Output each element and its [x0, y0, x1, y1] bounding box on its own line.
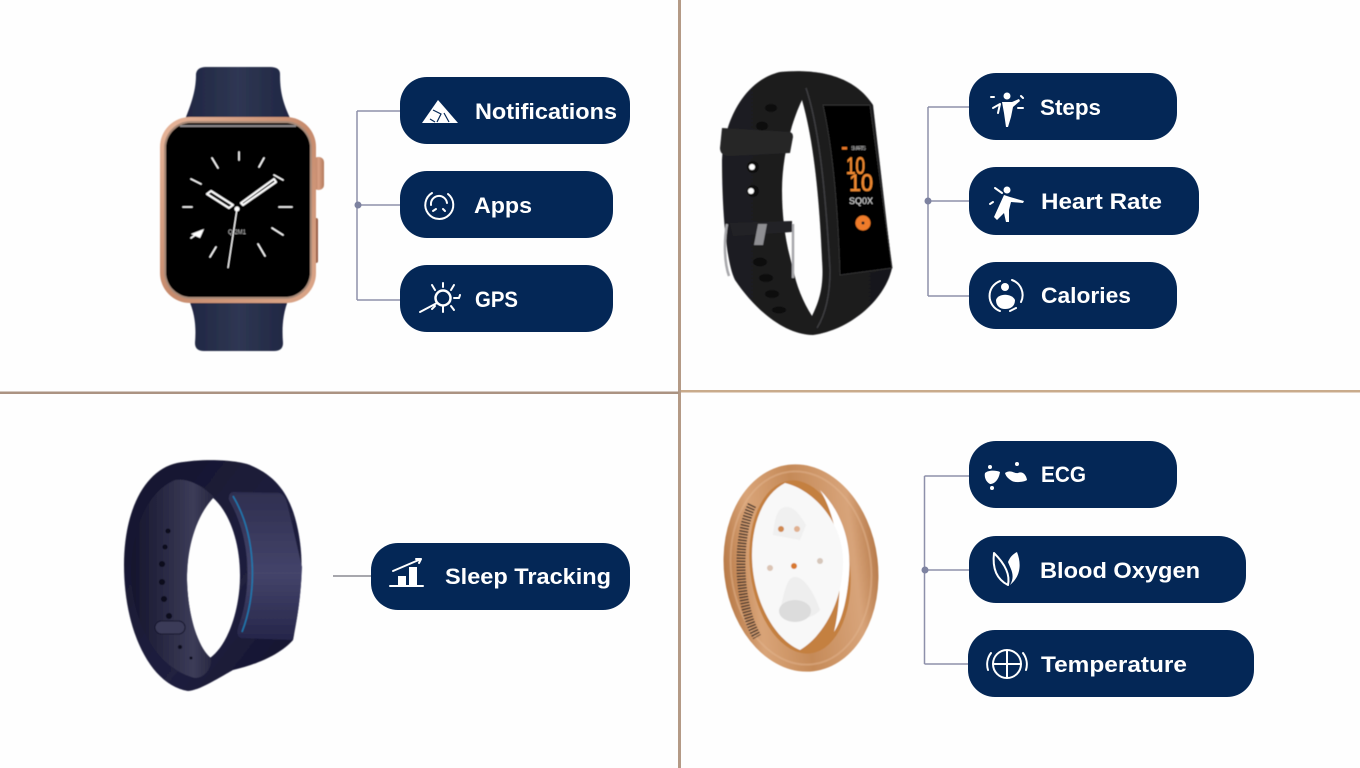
- feature pill: Temperature: [968, 630, 1254, 697]
- sleep band illustration: [124, 460, 302, 691]
- label: GPS: GPS: [475, 287, 518, 312]
- label: Blood Oxygen: Blood Oxygen: [1040, 558, 1200, 583]
- panel: fitness band: [720, 71, 1199, 335]
- connector: smartwatch features: [354, 111, 400, 300]
- feature pill: Steps: [969, 73, 1177, 140]
- label: Sleep Tracking: Sleep Tracking: [445, 564, 611, 589]
- icon: mountain: [422, 100, 458, 123]
- feature pill: Notifications: [400, 77, 630, 144]
- band buckle: [725, 221, 793, 278]
- watch face: Q.2M1: [228, 230, 247, 236]
- smartwatch illustration: [160, 67, 324, 351]
- icon: rising bar chart: [390, 559, 423, 586]
- feature pill: Apps: [400, 171, 613, 238]
- panel: smartwatch: [160, 67, 630, 351]
- feature pill: Sleep Tracking: [371, 543, 630, 610]
- feature pill: Heart Rate: [969, 167, 1199, 235]
- feature pill: GPS: [400, 265, 613, 332]
- fitness band illustration: [720, 71, 892, 335]
- label: Steps: Steps: [1040, 95, 1101, 120]
- feature pill: Calories: [969, 262, 1177, 329]
- ring sensor plate: [752, 483, 843, 650]
- label: Temperature: Temperature: [1041, 652, 1187, 677]
- band display: 10: [849, 170, 873, 197]
- smart ring illustration: [712, 455, 890, 681]
- label: Notifications: Notifications: [475, 99, 617, 124]
- icon: person in circle: [990, 280, 1023, 311]
- connector: sleep band feature: [333, 575, 371, 577]
- band display: 10: [846, 153, 865, 180]
- connector: ring features: [922, 476, 969, 664]
- feature pill: ECG: [969, 441, 1177, 508]
- icon: dial: [425, 193, 453, 219]
- panel: sleep band: [124, 460, 630, 691]
- icon: ECG blobs: [985, 462, 1027, 490]
- connector: band features: [924, 107, 969, 296]
- band display: [823, 105, 892, 275]
- watch face: [183, 152, 292, 268]
- icon: running figure: [990, 186, 1024, 222]
- clasp and strap holes: [155, 528, 192, 660]
- band display: SQ0X: [849, 196, 873, 206]
- feature pill: Blood Oxygen: [969, 536, 1246, 603]
- sensor panel: [229, 492, 302, 640]
- panel: smart ring: [712, 441, 1254, 697]
- band strap holes: [747, 104, 786, 314]
- label: Apps: Apps: [474, 193, 532, 218]
- icon: globe: [987, 650, 1027, 678]
- label: Heart Rate: Heart Rate: [1041, 189, 1162, 214]
- icon: leaf: [994, 552, 1020, 585]
- band keeper loop: [720, 128, 793, 156]
- icon: sun with pointer: [420, 283, 460, 312]
- label: ECG: ECG: [1041, 462, 1086, 487]
- band display: SMARTS: [851, 146, 867, 152]
- icon: walking figure: [991, 92, 1023, 127]
- label: Calories: Calories: [1041, 283, 1131, 308]
